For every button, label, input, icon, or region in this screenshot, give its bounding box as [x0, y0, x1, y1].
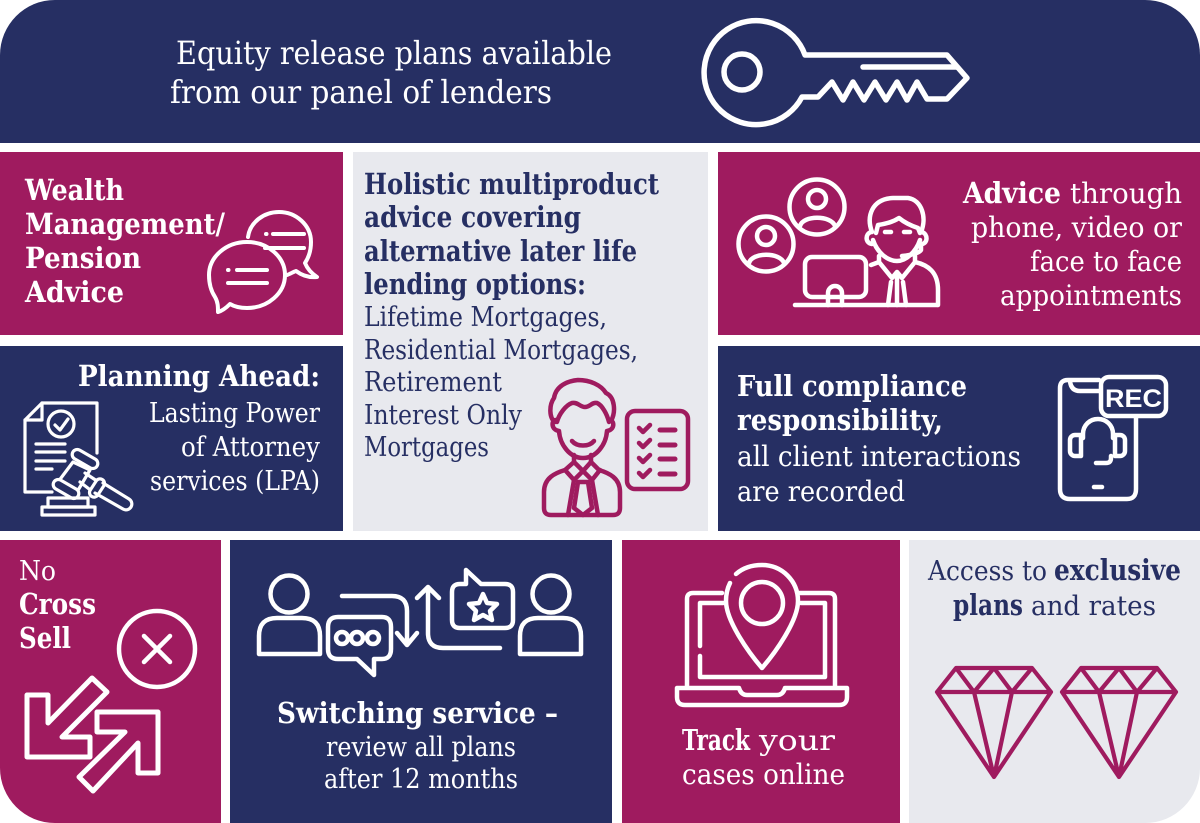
text: exclusive plans: plans	[953, 588, 1023, 622]
text: track your cases: Track	[682, 723, 751, 757]
text: no cross sell	[19, 556, 96, 655]
panel: holistic advice	[353, 152, 708, 531]
text: no cross sell: Sell	[19, 621, 71, 655]
panel: full compliance	[718, 346, 1200, 531]
icon: key	[704, 21, 967, 125]
text: advice through: Advice	[962, 176, 1061, 210]
text: planning ahead: Planning Ahead:	[78, 359, 320, 393]
text: planning ahead: Lasting Power	[149, 398, 320, 429]
icon: cross circle	[119, 611, 195, 687]
text: exclusive plans: and rates	[1031, 591, 1156, 622]
heading: equity release: Equity release plans available	[176, 36, 612, 72]
icon: laptop with location pin	[677, 565, 847, 705]
icon: recorded phone: REC	[1105, 385, 1162, 413]
text: wealth management heading: Management/	[25, 207, 226, 241]
text: full compliance: are recorded	[737, 475, 905, 508]
text: no cross sell: No	[19, 556, 56, 587]
text: track your cases: your	[758, 724, 836, 757]
text: mortgage list: Retirement	[364, 367, 502, 398]
icon: opposing arrows	[27, 678, 158, 791]
text: holistic advice heading: advice covering	[364, 200, 581, 234]
icon: diamonds	[937, 668, 1176, 777]
panel: exclusive plans	[909, 540, 1200, 823]
text: no cross sell: Cross	[19, 587, 96, 621]
text: planning ahead: of Attorney	[181, 432, 321, 463]
heading: equity release: from our panel of lenders	[170, 75, 552, 111]
text: holistic advice heading	[364, 167, 660, 301]
panel: wealth management	[0, 152, 343, 335]
text: mortgage list	[364, 302, 638, 463]
text: wealth management heading: Pension	[25, 241, 141, 275]
text: wealth management heading: Advice	[24, 275, 124, 309]
panel: track cases	[622, 540, 900, 823]
panel: advice channels	[718, 152, 1200, 335]
text: full compliance: Full compliance	[737, 369, 967, 403]
text: switching service	[277, 696, 558, 795]
text: planning ahead	[78, 359, 321, 497]
icon: chat bubbles	[209, 212, 317, 312]
text: full compliance	[737, 369, 1021, 508]
text: track your cases: cases online	[682, 758, 845, 791]
text: advice through: appointments	[1000, 279, 1182, 312]
icon: switching diagram	[259, 570, 581, 675]
text: mortgage list: Interest Only	[364, 400, 523, 431]
icon: document and gavel	[25, 403, 132, 515]
text: wealth management heading	[24, 173, 226, 309]
text: advice through: through	[1070, 177, 1182, 210]
panel: top banner	[0, 0, 1200, 143]
text: mortgage list: Mortgages	[364, 432, 489, 463]
text: switching service: after 12 months	[324, 764, 518, 795]
text: advice through	[962, 176, 1183, 312]
icon: call adviser	[738, 180, 938, 305]
text: holistic advice heading: Holistic multiproduct	[364, 167, 660, 201]
panel: switching service	[230, 540, 612, 823]
text: exclusive plans	[927, 553, 1181, 622]
text: exclusive plans: Access to	[927, 556, 1047, 587]
text: advice through: phone, video or	[971, 211, 1183, 244]
text: holistic advice heading: lending options:	[364, 267, 586, 301]
text: holistic advice heading: alternative later life	[364, 234, 637, 268]
text: mortgage list: Residential Mortgages,	[364, 335, 638, 366]
heading: equity release	[170, 36, 612, 111]
text: planning ahead: services (LPA)	[150, 466, 320, 497]
text: full compliance: responsibility,	[737, 403, 943, 437]
text: full compliance: all client interactions	[737, 440, 1021, 473]
text: track your cases	[682, 723, 845, 791]
panel: no cross sell	[0, 540, 221, 823]
text: switching service: Switching service –	[277, 696, 558, 730]
panel: planning ahead	[0, 346, 343, 531]
text: wealth management heading: Wealth	[24, 173, 124, 207]
text: advice through: face to face	[1030, 245, 1182, 278]
text: mortgage list: Lifetime Mortgages,	[364, 302, 607, 333]
text: switching service: review all plans	[326, 732, 516, 763]
icon: recorded phone	[1060, 377, 1166, 499]
icon: adviser with checklist	[544, 380, 688, 515]
text: exclusive plans: exclusive	[1054, 553, 1181, 587]
